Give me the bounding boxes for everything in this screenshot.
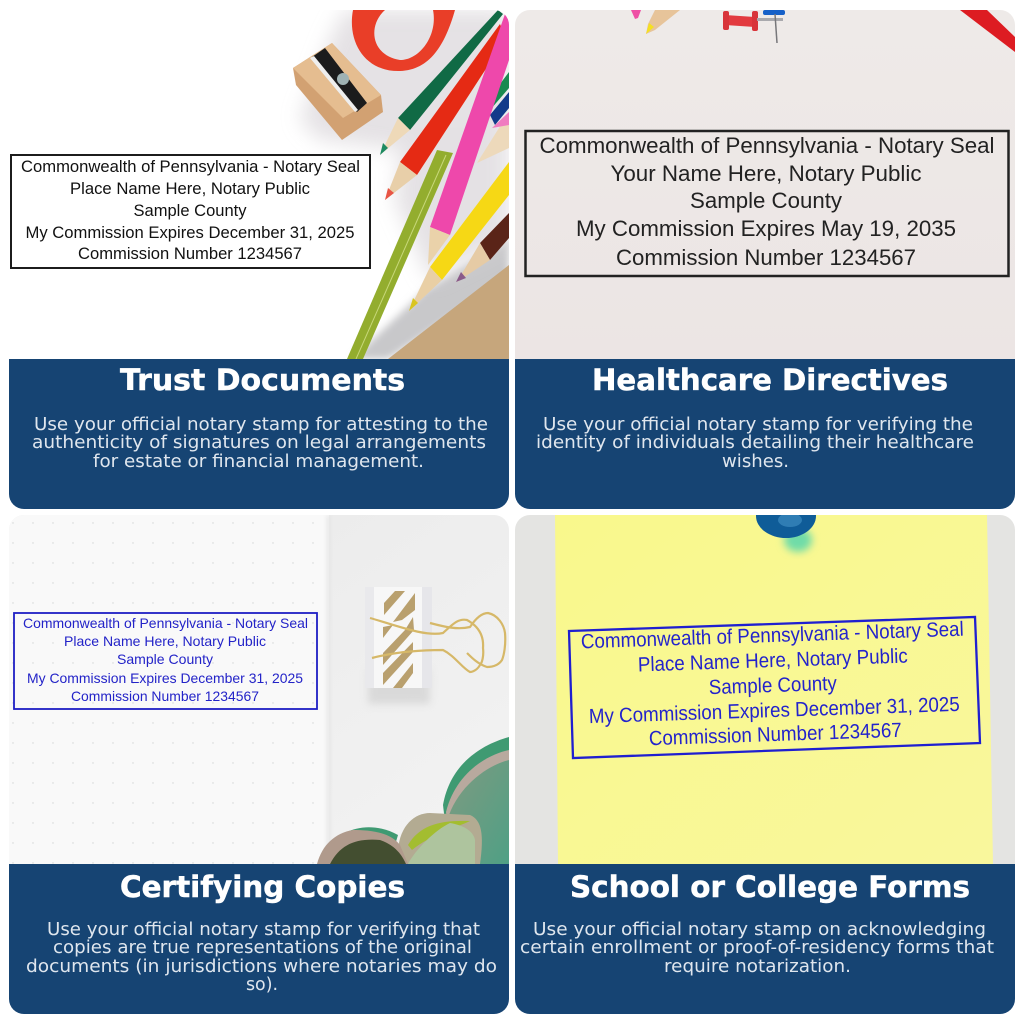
heading: School or College Forms: [570, 870, 970, 904]
body text: [538, 416, 973, 468]
photo: pencils and sharpener: [293, 10, 509, 359]
stamp text: black large: My Commission Expires May 19, 2035: [576, 216, 956, 241]
stamp text: black large: Sample County: [690, 188, 842, 213]
binder clip wires: [370, 613, 505, 672]
olive pencil: [347, 150, 453, 359]
caption band: [515, 359, 1015, 509]
photo: paper with pins: [515, 10, 1015, 359]
wooden sharpener: [293, 43, 383, 140]
body text: [520, 919, 994, 977]
stamp text: black: [11, 155, 370, 268]
heading: Certifying Copies: [120, 870, 405, 904]
brown pencil: [480, 213, 509, 260]
stamp text: black large: Your Name Here, Notary Public: [610, 161, 922, 186]
stamp text: rotated blue: Sample County: [708, 672, 838, 699]
stamp text: black large: [526, 131, 1008, 276]
caption band: [9, 359, 509, 509]
caption band: [9, 864, 509, 1014]
stamp text: rotated blue: Commonwealth of Pennsylvania - Notary Seal: [581, 618, 964, 653]
red scissor ring: [352, 10, 455, 71]
stamp text: blue: [14, 613, 317, 709]
caption band: [515, 864, 1015, 1014]
photo: notebook, binder clip, succulent: [9, 515, 509, 864]
stamp text: rotated blue: Commission Number 1234567: [648, 719, 902, 750]
stamp text: black large: Commission Number 1234567: [616, 245, 916, 270]
binder clip body: [374, 587, 422, 688]
stamp text: rotated blue: My Commission Expires December 31, 2025: [589, 693, 960, 728]
stamp text: black: Sample County: [134, 202, 247, 220]
stamp text: rotated blue: [569, 617, 980, 758]
stamp text: blue: Place Name Here, Notary Public: [64, 633, 266, 649]
body text: copies are true representations of the original: [53, 937, 472, 958]
panel: healthcare directives: [515, 10, 1015, 509]
body text: [26, 919, 497, 995]
stamp text: blue: My Commission Expires December 31, 2025: [27, 670, 303, 686]
photo: yellow note with pushpin: [515, 494, 1015, 864]
succulent leaves: [443, 737, 509, 814]
body text: authenticity of signatures on legal arrangements: [32, 432, 486, 453]
green pencil: [398, 10, 503, 130]
panel: trust documents: [9, 10, 509, 509]
stamp text: black: Commonwealth of Pennsylvania - Notary Seal: [21, 158, 360, 176]
stamp text: black: My Commission Expires December 31, 2025: [26, 224, 354, 242]
stamp text: black: Place Name Here, Notary Public: [70, 180, 310, 198]
stamp text: rotated blue: Place Name Here, Notary Public: [637, 645, 908, 676]
body text: documents (in jurisdictions where notaries may do: [26, 956, 497, 977]
panel: school or college forms: [515, 494, 1015, 1014]
body text: Use your official notary stamp for verifying the: [543, 414, 973, 435]
stamp text: black large: Commonwealth of Pennsylvania - Notary Seal: [540, 133, 994, 158]
pink pencil: [430, 14, 509, 235]
body text: [32, 414, 488, 472]
panel: certifying copies: [9, 515, 509, 1014]
body text: require notarization.: [664, 956, 851, 977]
stamp text: blue: Sample County: [117, 651, 213, 667]
stamp text: blue: Commonwealth of Pennsylvania - Notary Seal: [23, 615, 308, 631]
heading: Healthcare Directives: [592, 363, 948, 397]
stamp text: black: Commission Number 1234567: [78, 245, 302, 263]
pink pencil 2: [477, 112, 509, 163]
yellow pencil: [430, 162, 509, 280]
stamp text: blue: Commission Number 1234567: [71, 688, 259, 704]
heading: Trust Documents: [120, 363, 405, 397]
body text: identity of individuals detailing their healthcare: [536, 432, 974, 453]
red pencil: [400, 24, 506, 175]
body text: Use your official notary stamp for attesting to the: [34, 414, 488, 435]
body text: wishes.: [722, 451, 789, 472]
body text: for estate or financial management.: [93, 451, 424, 472]
body text: certain enrollment or proof-of-residency forms that: [520, 937, 994, 958]
body text: Use your official notary stamp for verifying that: [47, 919, 480, 940]
body text: so).: [246, 974, 278, 995]
blue pencil hint: [490, 92, 509, 125]
body text: Use your official notary stamp on acknowledging: [533, 919, 986, 940]
